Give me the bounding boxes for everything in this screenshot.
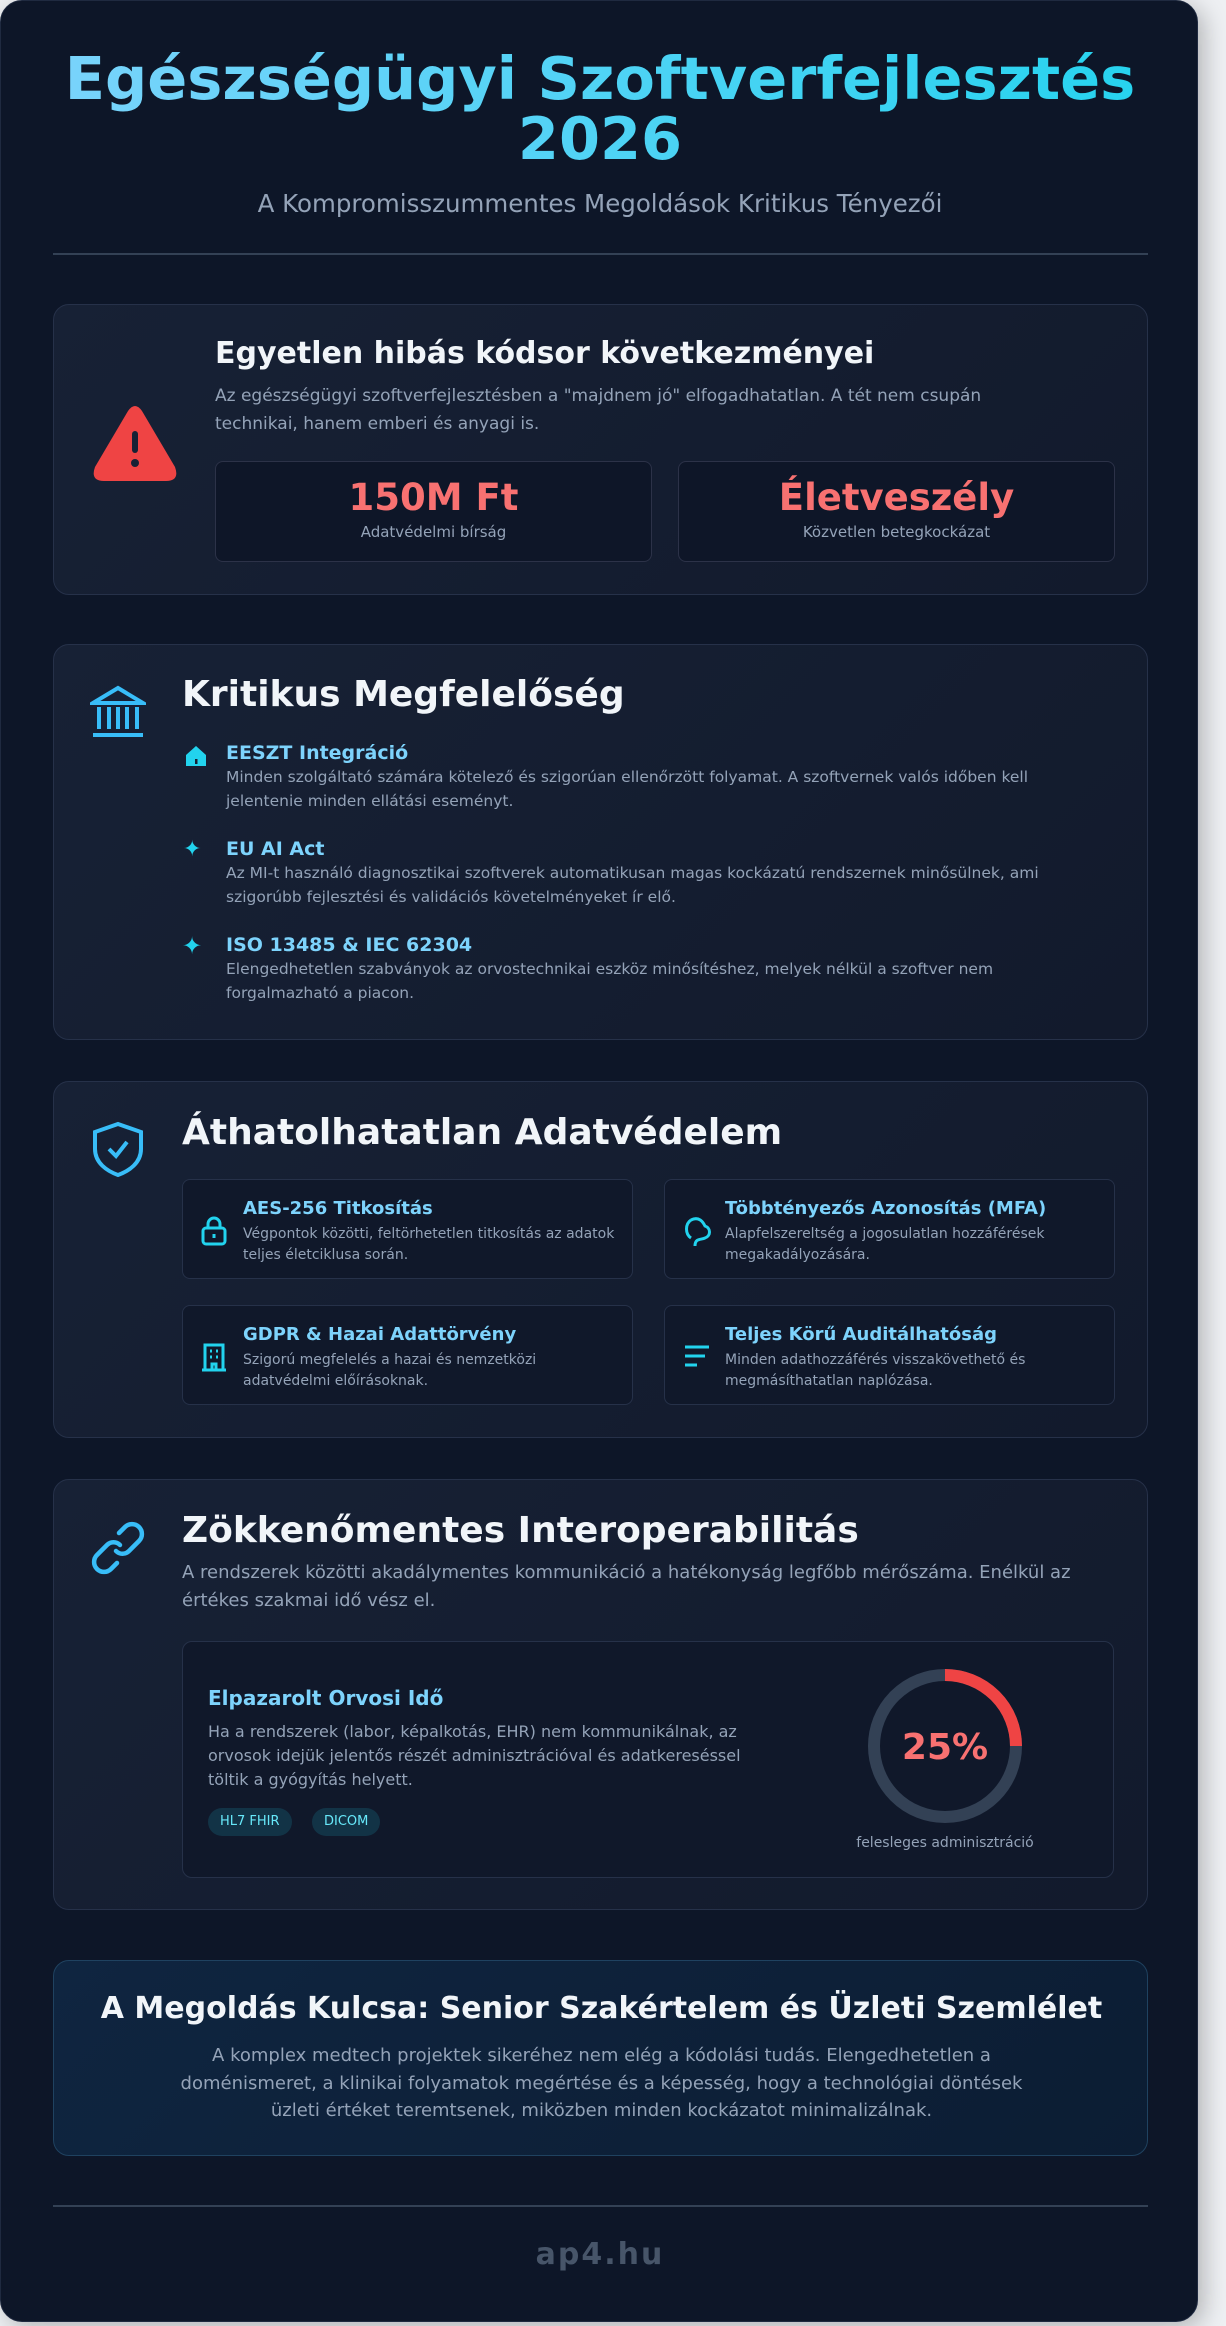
box: AES: AES-256 Titkosítás <box>243 1198 433 1219</box>
panel: interoperability <box>53 1479 1148 1910</box>
box: GDPR: adatvédelmi előírásoknak. <box>243 1373 428 1389</box>
box: MFA <box>664 1179 1115 1279</box>
item: EU AI Act: Az MI-t használó diagnosztikai szoftverek automatikusan magas kockázatú rendszernek minősülnek, ami szigorúbb fejlesztési és validációs követelményeket ír elő. <box>226 864 1039 906</box>
box: audit: Teljes Körű Auditálhatóság <box>725 1324 997 1345</box>
stat: fine: Adatvédelmi bírság <box>361 523 506 541</box>
donut chart <box>868 1669 1022 1823</box>
subtitle: A Kompromisszummentes Megoldások Kritikus Tényezői <box>258 189 942 218</box>
item: EU AI Act <box>226 838 1039 906</box>
donut label: felesleges adminisztráció <box>856 1835 1034 1851</box>
box: AES <box>182 1179 633 1279</box>
stat: life <box>678 461 1115 562</box>
box: MFA: Többtényezős Azonosítás (MFA) <box>725 1198 1046 1219</box>
stat: fine <box>215 461 652 562</box>
box: MFA: Alapfelszereltség a jogosulatlan hozzáférések megakadályozására. <box>725 1226 1044 1263</box>
box: GDPR: Szigorú megfelelés a hazai és nemzetközi <box>243 1352 536 1368</box>
box: AES: Végpontok közötti, feltörhetetlen titkosítás az adatok teljes életciklusa során. <box>243 1226 614 1263</box>
tags <box>208 1808 380 1836</box>
icon: ai: ✦ <box>183 837 201 862</box>
heading: Elpazarolt Orvosi Idő <box>208 1686 443 1710</box>
inner panel: wasted time <box>182 1641 1114 1878</box>
donut chart: 25% <box>902 1727 988 1768</box>
heading: compliance: Kritikus Megfelelőség <box>182 674 625 715</box>
stat: fine: 150M Ft <box>349 476 518 519</box>
icon: home <box>186 746 206 766</box>
item: EESZT: EESZT Integráció <box>226 742 408 764</box>
title <box>1 49 1199 169</box>
title: Egészségügyi Szoftverfejlesztés <box>65 44 1135 113</box>
box: audit: Minden adathozzáférés visszakövethető és megmásíthatatlan naplózása. <box>725 1352 1025 1389</box>
stat: life: Életveszély <box>779 476 1014 519</box>
item: ISO: Elengedhetetlen szabványok az orvostechnikai eszköz minősítéshez, melyek nélkül a szoftver nem forgalmazható a piacon. <box>226 960 993 1002</box>
footer: ap4.hu <box>536 2237 664 2272</box>
tags: HL7 FHIR <box>220 1814 280 1829</box>
title: 2026 <box>518 104 682 173</box>
box: audit <box>664 1305 1115 1405</box>
heading: data protection: Áthatolhatatlan Adatvédelem <box>182 1112 782 1153</box>
icon: bank <box>90 686 146 737</box>
heading: Egyetlen hibás kódsor következményei <box>215 336 874 371</box>
icon: link <box>92 1522 144 1574</box>
text: Ha a rendszerek (labor, képalkotás, EHR) nem kommunikálnak, az orvosok idejük jelentős részét adminisztrációval és adatkereséssel töltik a gyógyítás helyett. <box>208 1722 741 1789</box>
icon: shield <box>93 1122 143 1177</box>
panel: data protection <box>53 1081 1148 1438</box>
heading: A Megoldás Kulcsa: Senior Szakértelem és Üzleti Szemlélet <box>101 1991 1102 2026</box>
stat: life: Közvetlen betegkockázat <box>803 523 990 541</box>
panel: compliance <box>53 644 1148 1040</box>
panel: consequences <box>53 304 1148 595</box>
box: GDPR: GDPR & Hazai Adattörvény <box>243 1324 516 1345</box>
box: GDPR <box>182 1305 633 1405</box>
item: EESZT: Minden szolgáltató számára kötelező és szigorúan ellenőrzött folyamat. A szoftvernek valós időben kell jelentenie minden ellátási eseményt. <box>226 768 1028 810</box>
icon: warning <box>94 406 176 481</box>
heading: interoperability: Zökkenőmentes Interoperabilitás <box>182 1510 859 1551</box>
item: ISO: ISO 13485 & IEC 62304 <box>226 934 472 956</box>
tags: DICOM <box>324 1814 368 1829</box>
text: A rendszerek közötti akadálymentes kommunikáció a hatékonyság legfőbb mérőszáma. Enélkül az értékes szakmai idő vész el. <box>182 1562 1071 1611</box>
icon: sparkles: ✦ <box>182 932 202 960</box>
item: ISO <box>226 934 993 1002</box>
text: Az egészségügyi szoftverfejlesztésben a "majdnem jó" elfogadhatatlan. A tét nem csupán technikai, hanem emberi és anyagi is. <box>215 386 981 434</box>
item: EESZT <box>226 742 1028 810</box>
text: A komplex medtech projektek sikeréhez nem elég a kódolási tudás. Elengedhetetlen a doménismeret, a klinikai folyamatok megértése és a képesség, hogy a technológiai döntések üzleti értéket teremtsenek, miközben minden kockázatot minimalizálnak. <box>181 2045 1022 2121</box>
panel: solution <box>53 1960 1148 2156</box>
item: EU AI Act: EU AI Act <box>226 838 324 860</box>
